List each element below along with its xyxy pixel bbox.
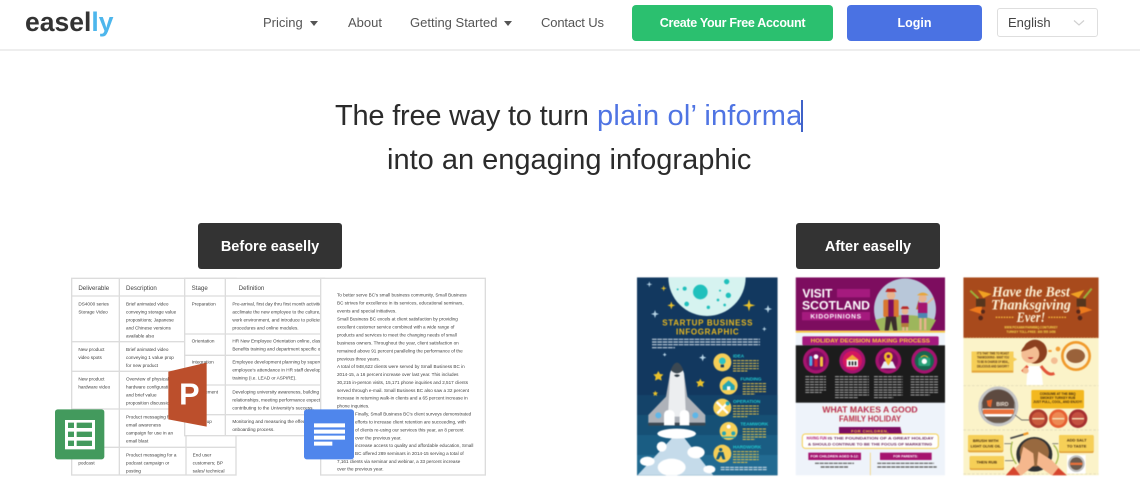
table: stages: Pre-arrival, first day thru first month activities	[232, 302, 325, 307]
list: operation	[713, 399, 761, 417]
for children aged: FOR CHILDREN AGED 9-12:	[810, 455, 859, 459]
what makes heading: WHAT MAKES A GOOD	[822, 405, 918, 415]
table: deliverables: proposition discussion	[126, 401, 172, 406]
add salt label	[1052, 435, 1094, 453]
table: stages: Preparation	[192, 302, 216, 307]
table: deliverables: sales/ technical	[193, 468, 225, 473]
brush label: BRUSH WITH	[973, 438, 999, 443]
list: idea	[713, 353, 759, 371]
document page: 30,215 in-person visits, 15,171 phone inquiries and 2,517 clients	[337, 380, 469, 385]
brush label: LIGHT OLIVE OIL	[971, 444, 1001, 448]
header banner	[796, 277, 945, 333]
table: deliverables: propositions; Japanese	[126, 318, 174, 323]
headline	[335, 100, 803, 176]
headline line one: The free way to turn	[335, 100, 589, 132]
table: stages: Stage	[192, 285, 208, 292]
header banner: VISIT	[802, 287, 833, 301]
headline line one	[335, 100, 802, 132]
list: idea: IDEA	[733, 354, 745, 359]
header banner: KIDOPINIONS	[810, 313, 862, 320]
title: INFOGRAPHIC	[676, 327, 739, 336]
table: deliverables: email awareness	[126, 422, 162, 427]
document page: increase access to quality and affordable education, Small	[355, 443, 473, 448]
table: stages: Definition	[239, 285, 265, 292]
table: deliverables: conveying 1 value prop	[126, 355, 174, 360]
document page	[321, 278, 485, 475]
family illustration	[873, 278, 937, 332]
table: deliverables: video spots	[78, 355, 103, 360]
smoke cloud	[637, 429, 715, 476]
table: deliverables: New product	[78, 347, 105, 352]
for children tab	[839, 427, 902, 434]
sauce callout: CONSUME AT THE BBQ	[1040, 392, 1076, 396]
what makes heading	[822, 405, 918, 423]
process heading ribbon	[802, 336, 939, 345]
table: deliverables: hardware configuration	[126, 385, 174, 390]
divider	[869, 453, 871, 475]
speech bubble: TO BE IN CHARGE OF MEAL,	[977, 360, 1009, 364]
table: deliverables: available also	[126, 333, 155, 338]
table: deliverables: email blast	[126, 438, 149, 443]
rocket	[648, 362, 705, 426]
document page: events and special initiatives.	[337, 309, 396, 314]
intro text	[652, 339, 760, 348]
button: create account: Create Your Free Account	[660, 16, 805, 30]
nav: getting started: Getting Started	[410, 15, 497, 30]
add salt label: TO TASTE	[1067, 443, 1087, 448]
table: stages: training (i.e. LEAD or ASPIRE).	[232, 376, 297, 381]
table: stages: Follow-up	[192, 419, 212, 424]
moon	[668, 276, 746, 317]
label: before easelly	[198, 223, 342, 269]
list: hardwork: HARDWORK	[733, 444, 762, 449]
having fun callout: & SHOULD CONTINUE TO BE THE FOCUS OF MARKETING	[808, 442, 932, 446]
table: stages: Developing university awareness, building	[232, 389, 319, 394]
table: deliverables: for new product	[126, 363, 159, 368]
title banner: Have the Best	[991, 285, 1071, 301]
table: deliverables: Overview of physical	[126, 377, 169, 382]
sauce callout	[1031, 390, 1084, 408]
process text	[805, 377, 938, 398]
document page: increase in returning walk-in clients and a 65 percent increase in	[337, 396, 468, 401]
having fun callout	[802, 434, 938, 448]
table: deliverables: Storage Video	[78, 310, 108, 315]
document page: over the previous year.	[355, 435, 401, 440]
table: stages: Engagement	[192, 389, 219, 394]
document page: A total of 948,622 clients were served by Small Business BC in	[337, 364, 465, 369]
table: deliverables: End user	[193, 452, 212, 457]
brush label	[968, 435, 1012, 452]
list: teamwork	[720, 422, 769, 440]
process icons	[803, 348, 937, 374]
document page: efforts to increase client retention are succeeding, with	[355, 420, 466, 425]
document page: products and services to meet the changing needs of small	[337, 332, 457, 337]
having fun callout: IS THE FOUNDATION OF A GREAT HOLIDAY	[828, 437, 935, 441]
document page: 7,161 clients via seminar and webinar, a 33 percent increase	[337, 459, 461, 464]
table: deliverables: New product	[78, 377, 105, 382]
document page: BC offered 289 seminars in 2014-15 serving a total of	[355, 451, 464, 456]
speech bubble	[972, 351, 1017, 373]
icon: document	[304, 409, 354, 459]
language select: English	[1008, 15, 1051, 30]
table: deliverables: podcast campaign or	[126, 460, 170, 465]
headline line one: plain ol’ informa	[597, 100, 802, 132]
table: deliverables: Product messaging for	[126, 414, 173, 419]
table: stages: employee's attendance in HR staff developm	[232, 368, 325, 373]
table: stages: Employee development planning by superv	[232, 360, 322, 365]
rub tin: BIRD	[996, 402, 1009, 408]
background bands	[637, 277, 778, 475]
table: stages: Benefits training and department specific o	[232, 346, 321, 351]
table: stages: HR New Employee Orientation online, class	[232, 339, 323, 344]
then rub label: THEN RUB	[976, 460, 997, 465]
table: deliverables: posting	[126, 468, 141, 473]
table: deliverables: customers; BP	[193, 460, 223, 465]
icon: powerpoint: P	[179, 378, 200, 412]
table: stages: procedures and online modules.	[232, 326, 299, 331]
for parents: FOR PARENTS:	[893, 455, 918, 459]
for children tab: FOR CHILDREN,	[851, 428, 889, 433]
infographic: startup business	[636, 276, 778, 476]
logo: easelly	[25, 7, 113, 37]
title banner	[963, 277, 1099, 338]
what makes heading: FAMILY HOLIDAY	[839, 413, 901, 423]
icon: powerpoint	[168, 363, 207, 427]
title banner: WWW.PICKAWAYFARMBBQ.COM/TURKEY	[1004, 325, 1058, 329]
document page: To better serve BC's small business community, Small Business	[337, 293, 467, 298]
turkey plate	[1061, 341, 1091, 371]
typing cursor	[801, 100, 802, 132]
document page: previous three years.	[337, 356, 380, 361]
add salt label: ADD SALT	[1067, 437, 1087, 442]
small rub tin	[1067, 455, 1086, 474]
label: before easelly: Before easelly	[221, 239, 319, 255]
document page: over the previous year.	[337, 467, 383, 472]
table: stages: relationships, meeting performance expecta	[232, 397, 323, 402]
list: operation: OPERATION	[733, 399, 761, 404]
speech bubble: IT'S THAT TIME TO ROAST	[977, 351, 1009, 355]
table: stages: Integration	[192, 360, 214, 365]
table: stages: contributing to the University's success.	[232, 405, 314, 410]
having fun callout: HAVING FUN	[807, 436, 827, 441]
table: deliverables: Brief animated video	[126, 302, 169, 307]
icon: spreadsheet	[55, 409, 104, 459]
table: stages	[185, 278, 325, 436]
table: deliverables	[72, 278, 236, 475]
infographic: thanksgiving	[962, 276, 1100, 476]
table: deliverables: campaign for use in an	[126, 430, 174, 435]
roasting pan with hands	[1006, 433, 1067, 475]
rub tin	[978, 386, 1029, 426]
button: login: Login	[897, 16, 932, 30]
seasoning circles	[1029, 409, 1087, 428]
document page: BC strives for excellence in its services, educational seminars,	[337, 301, 464, 306]
chef woman	[1021, 340, 1060, 385]
list: funding	[720, 376, 766, 395]
section dividers	[963, 386, 1099, 474]
table: deliverables: Brief animated video	[126, 347, 169, 352]
title banner: Thanksgiving	[991, 297, 1071, 313]
table: deliverables: hardware video	[78, 385, 111, 390]
list: hardwork	[713, 444, 762, 463]
title banner: TURKEY TOLL-FREE: 800 555 3456	[1006, 330, 1056, 334]
label: after easelly: After easelly	[825, 239, 911, 255]
header bar	[0, 0, 1140, 51]
document page: phone inquiries.	[337, 404, 369, 409]
speech bubble: THANKSGIVING - WANT YOU	[977, 356, 1010, 360]
document page: remained above 91 percent paralleling the performance of the	[337, 348, 463, 353]
table: deliverables: and Chinese versions	[126, 326, 171, 331]
nav: pricing: Pricing	[263, 15, 303, 30]
process panel	[796, 345, 945, 403]
for children aged	[808, 453, 861, 467]
then rub label	[970, 456, 1014, 470]
title	[662, 319, 753, 336]
footer text	[721, 467, 767, 470]
table: stages: acclimate the new employee to the culture,	[232, 310, 321, 315]
document page: Finally, Small Business BC's client surveys demonstrated	[355, 412, 472, 417]
label: after easelly	[796, 223, 940, 269]
headline line two: into an engaging infographic	[387, 144, 751, 176]
autumn leaves right	[1070, 289, 1092, 320]
document page: of clients re-using our services this year, an 8 percent	[355, 428, 464, 433]
title: STARTUP BUSINESS	[662, 319, 753, 328]
table: deliverables: Deliverable	[78, 285, 110, 292]
nav: contact us: Contact Us	[541, 15, 604, 30]
table: deliverables: Product messaging for a	[126, 452, 177, 457]
table: stages: onboarding process.	[232, 427, 275, 432]
sauce callout: SMOKEY TURKEY RUB	[1040, 396, 1076, 400]
table: deliverables: podcast	[78, 461, 95, 466]
document page: Small Business BC excels at client satisfaction by providing	[337, 317, 458, 322]
table: deliverables: and brief value	[126, 393, 157, 398]
document page: excellent customer service combined with a wide range of	[337, 325, 455, 330]
stars	[653, 285, 755, 396]
document page: 2014-15, a 16 percent increase over last year. This includes	[337, 372, 459, 377]
table: stages: Orientation	[192, 339, 215, 344]
sauce callout: JUST PULL, COOL, AND ENJOY!	[1033, 400, 1082, 404]
document page: business owners. Throughout the year, client satisfaction on	[337, 340, 459, 345]
table: deliverables: conveying storage value	[126, 310, 177, 315]
process heading ribbon: HOLIDAY DECISION MAKING PROCESS	[811, 339, 931, 345]
table: deliverables: DS4000 series	[78, 302, 110, 307]
infographic: visit scotland	[794, 276, 946, 476]
for parents	[877, 453, 937, 467]
table: stages: Monitoring and measuring the effectiveness	[232, 419, 323, 424]
table: stages: work environment, and introduce to policies,	[232, 318, 323, 323]
list: teamwork: TEAMWORK	[740, 422, 769, 427]
list: funding: FUNDING	[740, 376, 762, 381]
nav: about: About	[348, 15, 382, 30]
button: login	[847, 5, 982, 41]
table: deliverables: Description	[126, 285, 157, 292]
document page: served through e-mail. Small Business BC also saw a 32 percent	[337, 388, 470, 393]
autumn leaves left	[969, 290, 992, 320]
title banner: Ever!	[1016, 310, 1045, 326]
button: create account	[632, 5, 833, 41]
before: documents collage	[55, 278, 486, 476]
language select	[997, 8, 1098, 37]
speech bubble: DELICIOUS AND SAVORY?	[977, 364, 1009, 368]
header banner: SCOTLAND	[802, 299, 870, 313]
